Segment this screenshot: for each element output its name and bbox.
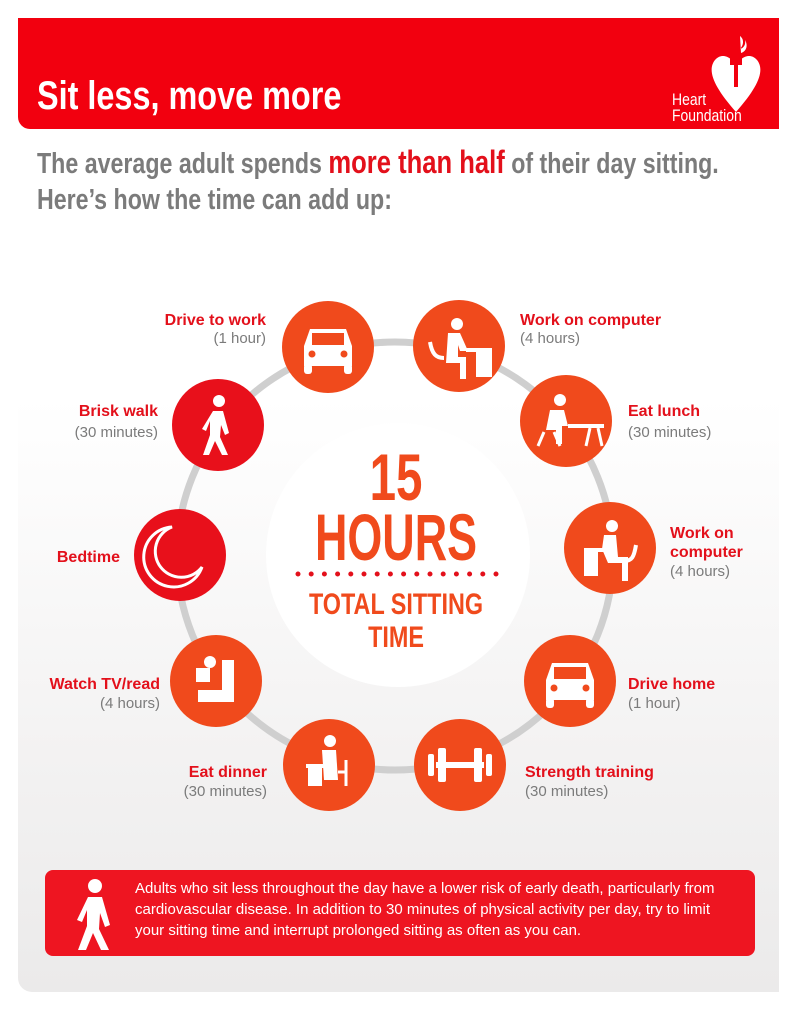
item: drive to work (165, 301, 374, 393)
item: work on computer 2: computer (670, 544, 743, 561)
subtitle: Here’s how the time can add up: (37, 184, 392, 216)
logo: Heart Foundation: Heart (672, 90, 706, 109)
item: eat dinner (184, 719, 375, 811)
item: drive home: Drive home (628, 676, 715, 693)
header bar (18, 18, 779, 129)
item: eat dinner: Eat dinner (189, 764, 267, 781)
item: drive to work: (1 hour) (213, 330, 266, 347)
center circle: TOTAL SITTING (309, 587, 483, 621)
item: work on computer (413, 300, 661, 392)
callout text: your sitting time and interrupt prolonged sitting as often as you can. (135, 922, 581, 939)
item: drive to work: Drive to work (165, 312, 266, 329)
item: brisk walk (75, 379, 264, 471)
item: eat dinner: (30 minutes) (184, 783, 267, 800)
item: watch TV/read: Watch TV/read (49, 676, 160, 693)
subtitle (37, 144, 719, 216)
background panel (18, 200, 779, 992)
item: brisk walk: (30 minutes) (75, 424, 158, 441)
callout text: Adults who sit less throughout the day have a lower risk of early death, particularly from (135, 880, 714, 897)
item: work on computer 2 (564, 502, 743, 594)
bottom callout (45, 870, 755, 956)
callout text: cardiovascular disease. In addition to 30 minutes of physical activity per day, try to limit (135, 901, 710, 918)
item: eat lunch: Eat lunch (628, 403, 700, 420)
item: drive home (524, 635, 715, 727)
item: watch TV/read (49, 635, 262, 727)
item: eat lunch (520, 375, 711, 467)
center circle: HOURS (315, 500, 477, 574)
item: work on computer: (4 hours) (520, 330, 580, 347)
item: drive home: (1 hour) (628, 695, 681, 712)
center circle (266, 423, 530, 687)
icon: walking person (77, 879, 110, 950)
title: Sit less, move more (37, 74, 341, 118)
center circle: TIME (368, 620, 424, 654)
center circle: 15 (370, 441, 422, 515)
subtitle: The average adult spends more than half of their day sitting. (37, 144, 719, 180)
item: strength training (414, 719, 654, 811)
item: strength training: (30 minutes) (525, 783, 608, 800)
item: strength training: Strength training (525, 764, 654, 781)
item: work on computer 2: (4 hours) (670, 563, 730, 580)
ring (177, 342, 613, 770)
item: brisk walk: Brisk walk (79, 403, 158, 420)
item: work on computer: Work on computer (520, 312, 661, 329)
item: eat lunch: (30 minutes) (628, 424, 711, 441)
callout text (135, 880, 714, 939)
item: watch TV/read: (4 hours) (100, 695, 160, 712)
item: bedtime: Bedtime (57, 549, 120, 566)
item: work on computer 2: Work on (670, 525, 734, 542)
item: bedtime (57, 509, 226, 601)
logo: Heart Foundation (672, 36, 760, 125)
logo: Heart Foundation: Foundation (672, 106, 742, 125)
